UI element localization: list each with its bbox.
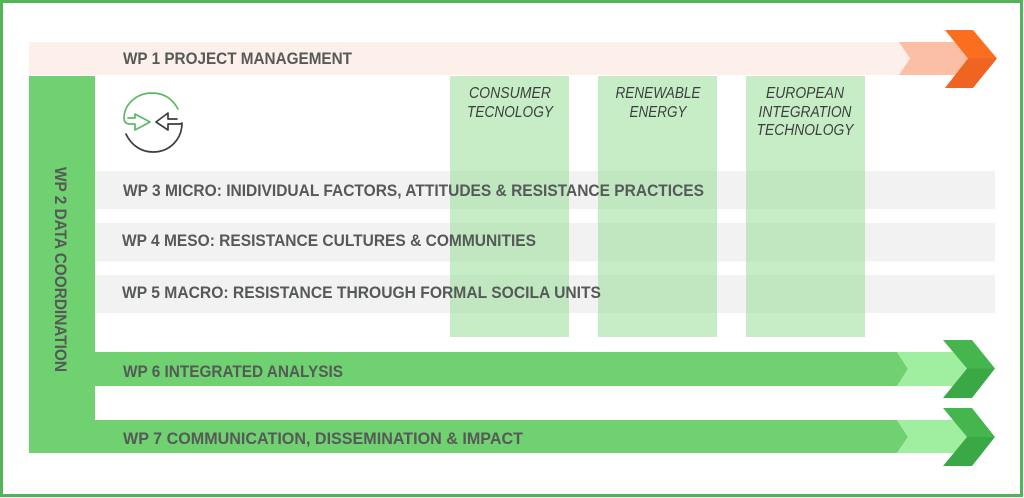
column: consumer technology (450, 76, 569, 337)
column: renewable energy (598, 76, 717, 337)
WP 2 data coordination column: WP 2 DATA COORDINATION (51, 167, 69, 372)
column: european integration technology (746, 76, 865, 337)
WP 5 label: WP 5 MACRO: RESISTANCE THROUGH FORMAL SOCILA UNITS (122, 284, 601, 302)
column: european integration technology: EUROPEAN (766, 85, 845, 102)
column: european integration technology: TECHNOLOGY (756, 122, 855, 139)
WP 5 band (95, 275, 995, 313)
WP 1 project management arrow: WP 1 PROJECT MANAGEMENT (123, 50, 352, 68)
WP 7 communication arrow: WP 7 COMMUNICATION, DISSEMINATION & IMPACT (123, 430, 523, 448)
column: renewable energy: RENEWABLE (616, 85, 701, 102)
column: renewable energy: ENERGY (630, 104, 688, 121)
icon: exchange arrows in circle (124, 93, 182, 152)
column: consumer technology: CONSUMER (469, 85, 551, 102)
column: consumer technology: TECNOLOGY (467, 104, 554, 121)
column: european integration technology: INTEGRATION (758, 104, 852, 121)
WP 2 data coordination column (29, 76, 95, 453)
WP 4 label: WP 4 MESO: RESISTANCE CULTURES & COMMUNITIES (122, 232, 536, 250)
WP 6 integrated analysis arrow (95, 340, 995, 398)
WP 6 integrated analysis arrow: WP 6 INTEGRATED ANALYSIS (123, 363, 343, 381)
WP 1 project management arrow (29, 30, 997, 88)
WP 3 label: WP 3 MICRO: INIDIVIDUAL FACTORS, ATTITUDES & RESISTANCE PRACTICES (123, 182, 704, 200)
WP 4 band (95, 223, 995, 262)
WP 7 communication arrow (95, 408, 995, 466)
WP 3 band (95, 171, 995, 209)
